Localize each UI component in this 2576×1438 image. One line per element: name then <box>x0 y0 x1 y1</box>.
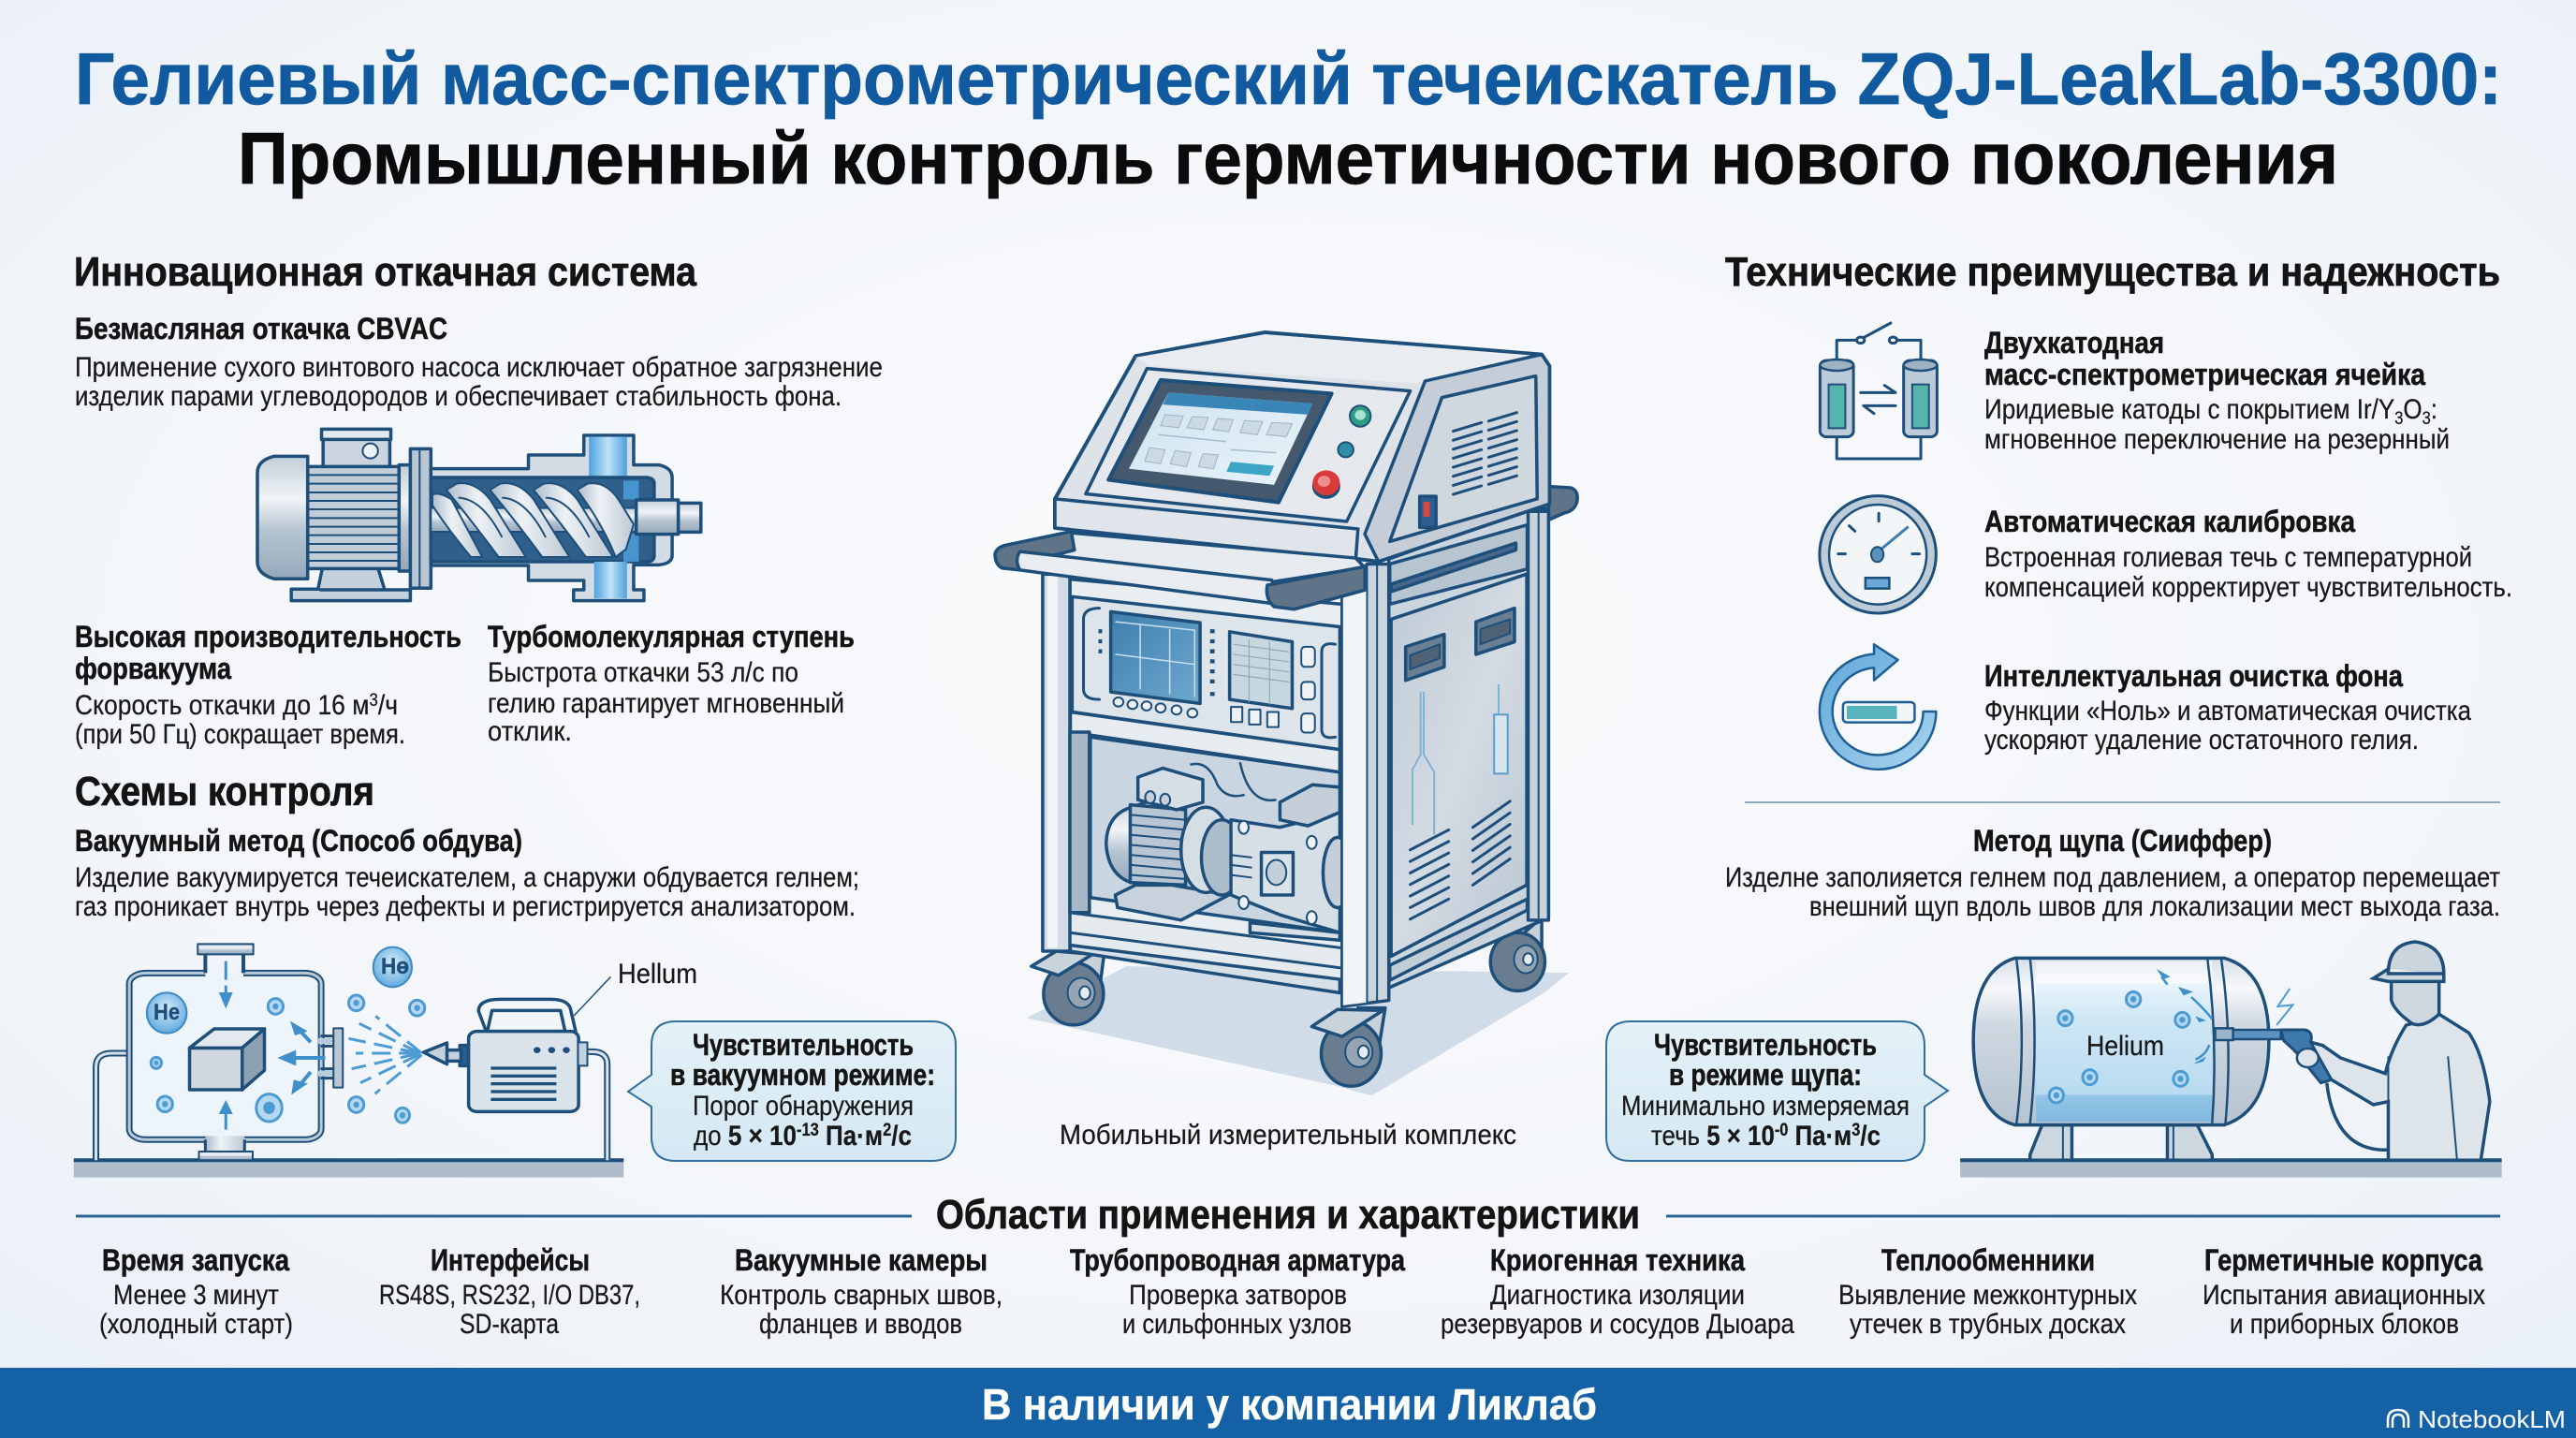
side cabinet <box>1389 509 1548 988</box>
callout: vacuum sensitivity: в вакуумном режиме: <box>670 1058 935 1092</box>
column: vacuum chambers: фланцев и вводов <box>759 1309 962 1340</box>
text block: turbomolecular stage: гелию гарантирует мгновенный <box>488 688 844 719</box>
icon: dual cathode cell <box>1820 323 1937 459</box>
text block: calibration: Автоматическая калибровка <box>1984 505 2355 538</box>
column: heat exchangers <box>1838 1243 2137 1340</box>
column: heat exchangers: Выявление межконтурных <box>1838 1280 2137 1311</box>
text block: forevacuum: Скорость откачки до 16 м <box>75 690 408 721</box>
console <box>1055 332 1549 562</box>
arrows <box>225 961 227 1000</box>
instrument rack <box>1072 596 1339 750</box>
front columns <box>1043 574 1070 951</box>
icon: screw pump cutaway <box>257 429 701 601</box>
label: He left: He <box>154 1000 180 1025</box>
column: interfaces: RS48S, RS232, I/O DB37, <box>379 1280 640 1311</box>
callout: vacuum sensitivity: /с <box>891 1121 912 1152</box>
text block: background cleaning: Функции «Ноль» и автоматическая очистка <box>1984 696 2471 726</box>
text block: vacuum method: газ проникает внутрь через дефекты и регистрируется анализатором. <box>75 891 856 922</box>
callout: sniffer sensitivity: Минимально измеряемая <box>1621 1091 1910 1122</box>
title: Промышленный контроль герметичности нового поколения <box>238 117 2338 199</box>
label: helium in tank: Helium <box>2086 1031 2164 1062</box>
He bubbles <box>147 992 186 1034</box>
label: Helium: Hellum <box>618 959 697 990</box>
column: cryogenics: резервуаров и сосудов Дыоара <box>1441 1309 1794 1340</box>
column: startup time: Менее 3 минут <box>113 1280 279 1311</box>
chart: tank and operator <box>1960 942 2502 1178</box>
pipes <box>95 1053 129 1160</box>
small helium particles <box>151 995 425 1123</box>
column: cryogenics <box>1441 1243 1794 1340</box>
leak arrows <box>2157 969 2206 1022</box>
text block: CBVAC <box>75 312 883 412</box>
heading: applications: Области применения и характеристики <box>936 1192 1640 1238</box>
text block: background cleaning: ускоряют удаление остаточного гелия. <box>1984 725 2419 756</box>
rotary pump <box>1231 813 1339 932</box>
column: pipe fittings: Проверка затворов <box>1129 1280 1347 1311</box>
tank legs <box>2030 1125 2071 1160</box>
text block: calibration: Встроенная голиевая течь с температурной <box>1984 542 2472 573</box>
heading: control schemes: Схемы контроля <box>75 769 374 814</box>
icon: gauge <box>1820 496 1936 613</box>
panel: innovative pumping system <box>74 249 883 750</box>
text block: sniffer method: Метод щупа (Сииффер) <box>1973 824 2272 858</box>
panel: applications and characteristics <box>76 1192 2500 1340</box>
text block: turbomolecular stage: Турбомолекулярная ступень <box>488 620 855 653</box>
callout: sniffer sensitivity: /с <box>1860 1121 1881 1152</box>
front frame and bays <box>1070 580 1342 993</box>
central machine illustration <box>995 332 1577 1095</box>
callout: vacuum sensitivity: до 5 × 10 <box>694 1121 807 1152</box>
column: cryogenics: Криогенная техника <box>1490 1243 1745 1277</box>
column: cryogenics: Диагностика изоляции <box>1490 1280 1745 1311</box>
column: interfaces: SD-карта <box>460 1309 559 1340</box>
text block: dual cathode: Двухкатодная <box>1984 326 2164 360</box>
text block: background cleaning <box>1984 659 2471 756</box>
text block: dual cathode: 3 <box>2394 409 2403 429</box>
column: startup time: Время запуска <box>102 1243 289 1277</box>
text block: dual cathode <box>1984 326 2450 455</box>
tank <box>1973 958 2269 1125</box>
text block: CBVAC: Безмасляная откачка CBVAC <box>75 312 447 345</box>
callout: sniffer sensitivity: -0 <box>1775 1121 1788 1140</box>
column: startup time <box>99 1243 293 1340</box>
front handle <box>1020 533 1365 581</box>
cube <box>189 1048 242 1090</box>
text block: forevacuum: Высокая производительность <box>75 620 461 653</box>
callout: sniffer sensitivity: в режиме щупа: <box>1669 1058 1862 1092</box>
operator <box>2296 1014 2490 1160</box>
callout: vacuum sensitivity: -13 <box>797 1121 819 1140</box>
wheels <box>1032 917 1544 1086</box>
column: pipe fittings: и сильфонных узлов <box>1122 1309 1352 1340</box>
text block: turbomolecular stage: отклик. <box>488 716 572 747</box>
footer text: В наличии у компании Ликлаб <box>982 1380 1597 1429</box>
heading: technical advantages: Технические преимущества и надежность <box>1725 249 2500 295</box>
column: vacuum chambers: Контроль сварных швов, <box>720 1280 1003 1311</box>
text block: calibration <box>1984 505 2512 603</box>
text block: background cleaning: Интеллектуальная очистка фона <box>1984 659 2403 693</box>
logo: NotebookLM: NotebookLM <box>2418 1405 2566 1433</box>
callout: vacuum sensitivity: Па·м <box>819 1121 883 1152</box>
panel: sniffer method <box>1606 824 2502 1178</box>
floor shadow <box>1027 966 1569 1095</box>
text block: vacuum method: Вакуумный метод (Способ обдува) <box>75 824 522 858</box>
column: heat exchangers: утечек в трубных досках <box>1850 1309 2126 1340</box>
callout: sniffer sensitivity <box>1606 1021 1948 1161</box>
callout: vacuum sensitivity: 2 <box>883 1121 891 1140</box>
callout: sniffer sensitivity: течь 5 × 10 <box>1651 1121 1785 1152</box>
column: startup time: (холодный старт) <box>99 1309 293 1340</box>
text block: dual cathode: мгновенное переключение на резернный <box>1984 424 2450 455</box>
touchscreen <box>1108 380 1332 503</box>
column: vacuum chambers: Вакуумные камеры <box>735 1243 988 1277</box>
text block: dual cathode: Иридиевые катоды с покрытием Ir/Y <box>1984 394 2458 425</box>
chart: vacuum chamber diagram <box>74 944 623 1178</box>
column: interfaces: Интерфейсы <box>431 1243 590 1277</box>
panel: technical advantages <box>1725 249 2512 770</box>
helium particles <box>2049 991 2189 1103</box>
spray <box>348 1016 422 1093</box>
hose <box>2327 1083 2457 1150</box>
text block: forevacuum: /ч <box>378 690 398 721</box>
column: pipe fittings <box>1070 1243 1405 1340</box>
column: hermetic housings: Герметичные корпуса <box>2204 1243 2482 1277</box>
motor <box>1190 762 1277 800</box>
shelf <box>1070 712 1339 772</box>
base <box>1960 1160 2502 1178</box>
text block: forevacuum: 3 <box>369 691 378 711</box>
text block: turbomolecular stage: Быстрота откачки 53 л/с по <box>488 657 798 688</box>
inlet ports <box>320 1036 336 1078</box>
column: hermetic housings <box>2203 1243 2485 1340</box>
callout: sniffer sensitivity: Чувствительность <box>1654 1028 1877 1062</box>
callout: vacuum sensitivity: Порог обнаружения <box>693 1091 914 1122</box>
text block: forevacuum: форвакуума <box>75 652 231 685</box>
column: hermetic housings: Испытания авиационных <box>2203 1280 2485 1311</box>
heading: pumping system: Инновационная откачная система <box>74 249 696 295</box>
text block: vacuum method: Изделие вакуумируется течеискателем, а снаружи обдувается гелнем; <box>75 862 859 893</box>
text block: CBVAC: изделик парами углеводородов и обеспечивает стабильность фона. <box>75 381 842 412</box>
panel: control schemes <box>74 769 956 1178</box>
rear handle <box>1548 486 1577 520</box>
panel buttons <box>1350 405 1370 427</box>
callout: sniffer sensitivity: Па·м <box>1788 1121 1852 1152</box>
column: pipe fittings: Трубопроводная арматура <box>1070 1243 1405 1277</box>
callout: sniffer sensitivity: 3 <box>1852 1121 1860 1140</box>
column: interfaces <box>379 1243 640 1340</box>
text block: vacuum method <box>75 824 859 922</box>
label: He right: Hө <box>381 954 409 979</box>
callout: vacuum sensitivity <box>628 1021 956 1161</box>
text block: CBVAC: Применение сухого винтового насоса исключает обратное загрязнение <box>75 352 883 383</box>
callout: vacuum sensitivity: Чувствительность <box>693 1028 914 1062</box>
icon: cleaning cycle <box>1820 644 1936 770</box>
text block: dual cathode: O <box>2403 394 2422 425</box>
footer bar <box>0 1368 2576 1438</box>
column: vacuum chambers <box>720 1243 1003 1340</box>
text block: forevacuum: (при 50 Гц) сокращает время. <box>75 719 405 750</box>
device <box>478 999 576 1032</box>
text block: forevacuum <box>75 620 461 750</box>
chamber <box>129 973 321 1139</box>
text block: dual cathode: : <box>2431 394 2437 425</box>
text block: turbomolecular stage <box>488 620 855 747</box>
text block: dual cathode: 3 <box>2422 409 2431 429</box>
text block: dual cathode: масс-спектрометрическая ячейка <box>1984 358 2425 391</box>
column: heat exchangers: Теплообменники <box>1881 1243 2095 1277</box>
text block: sniffer method <box>1725 824 2500 922</box>
title: Гелиевый масс-спектрометрический течеискатель ZQJ-LeakLab-3300: <box>75 37 2502 120</box>
sniffer gun <box>2281 1030 2332 1083</box>
column: hermetic housings: и приборных блоков <box>2230 1309 2459 1340</box>
base plate <box>74 1160 623 1178</box>
title <box>75 37 2502 199</box>
caption: mobile measuring complex: Мобильный измерительный комплекс <box>1060 1120 1516 1151</box>
